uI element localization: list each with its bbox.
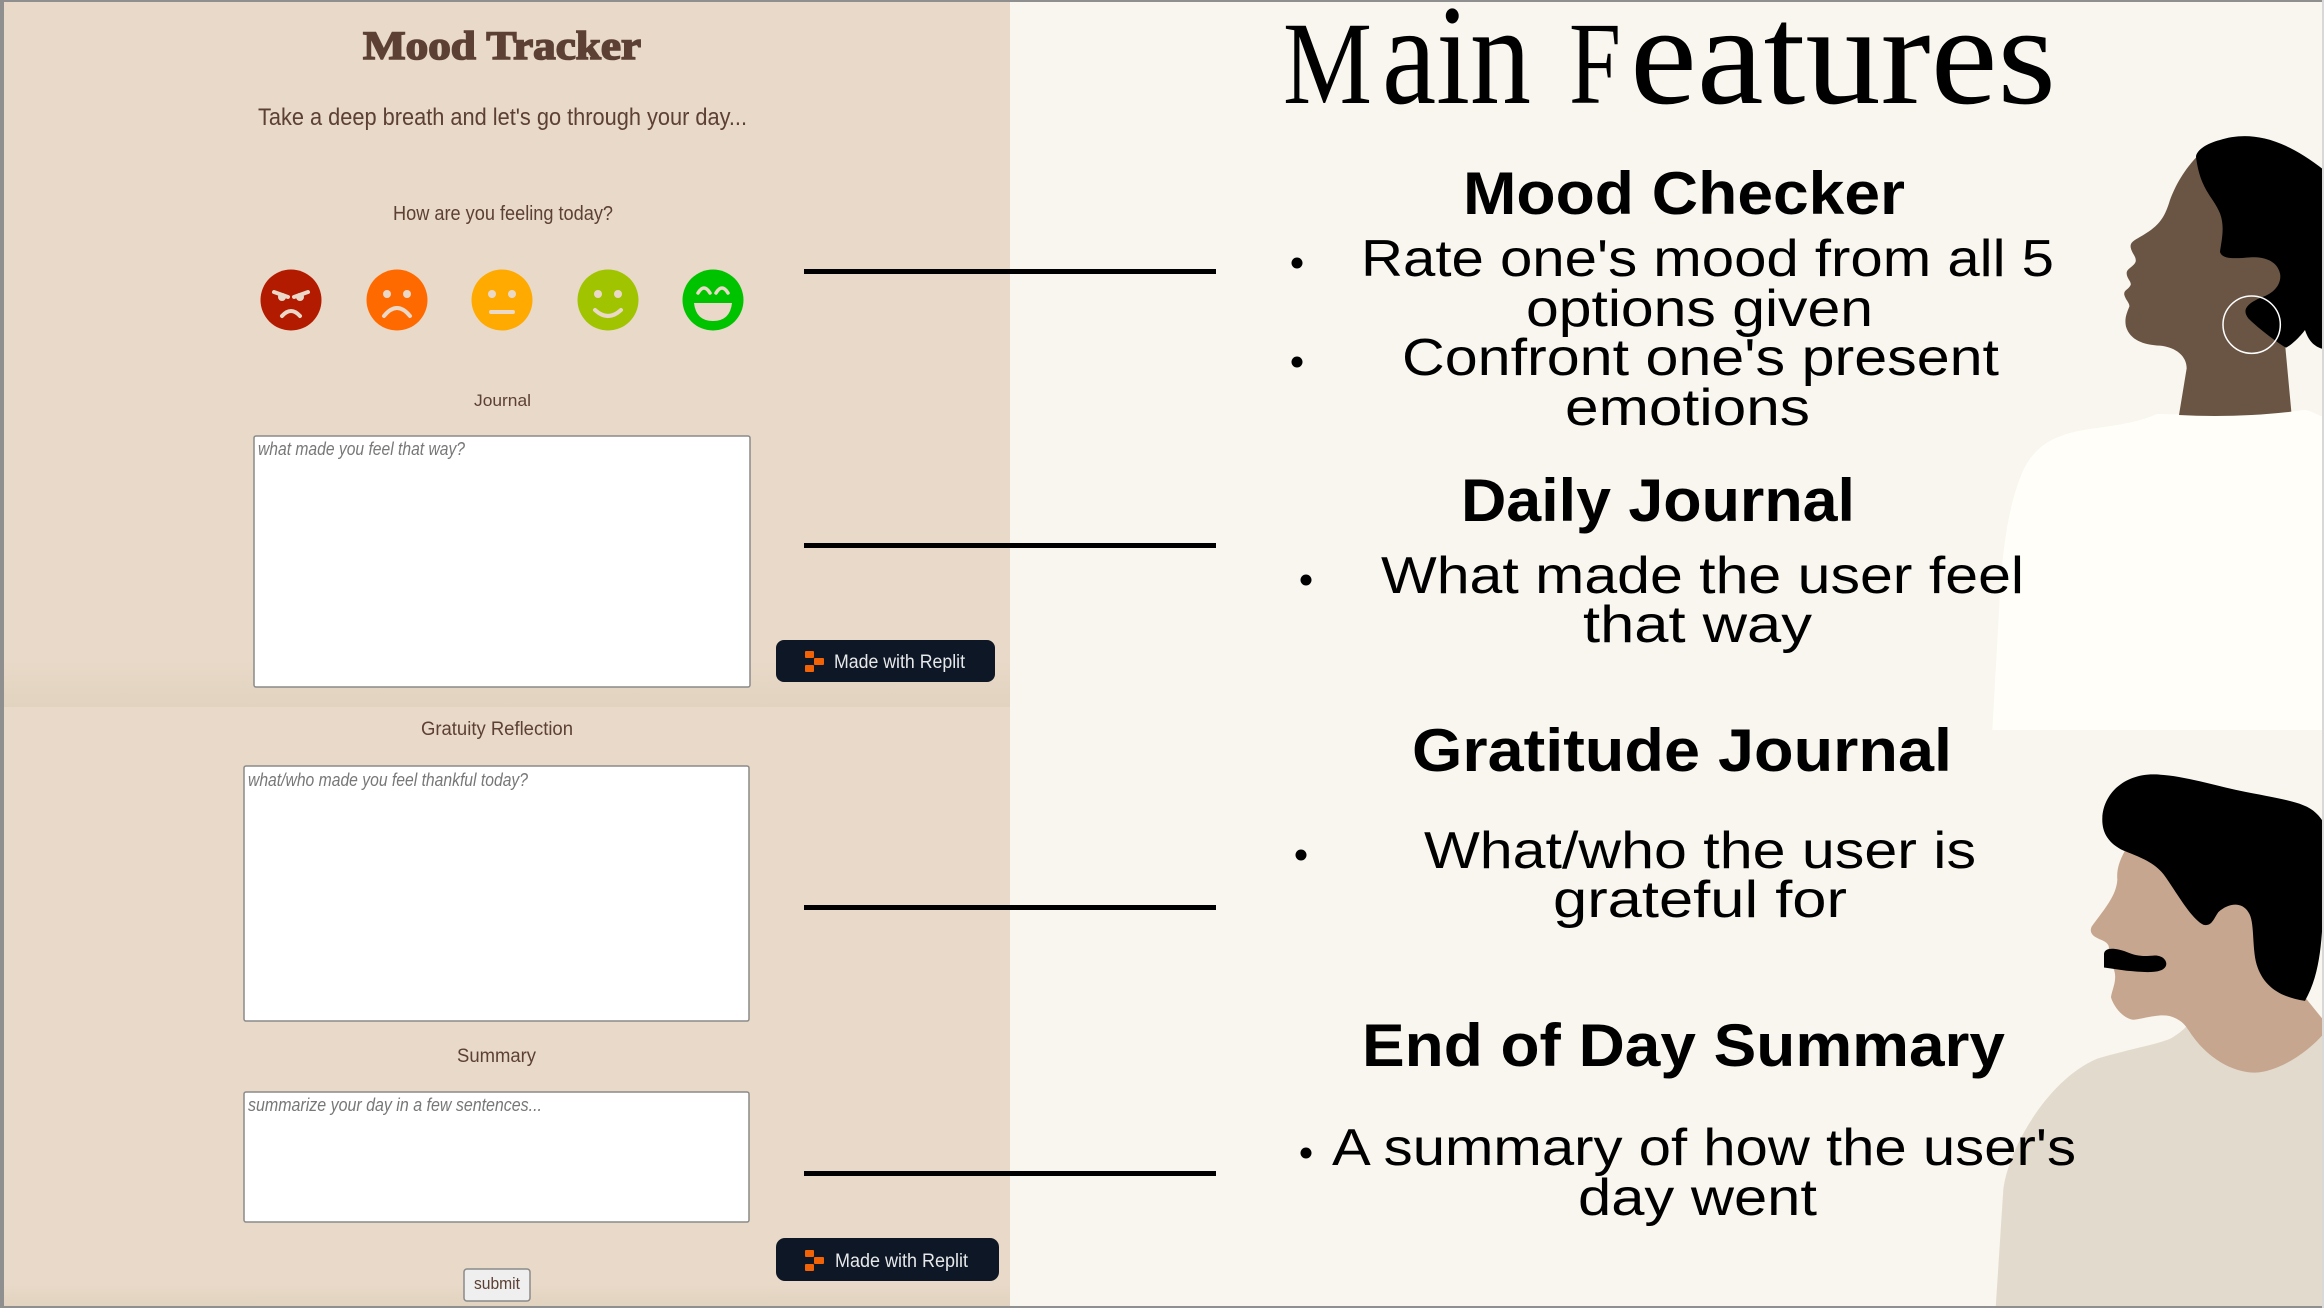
journal textarea: what made you feel that way? (258, 439, 465, 459)
bullet point one: options given (1526, 280, 1873, 338)
feature: end of day summary (1300, 1012, 2076, 1227)
app tagline: Take a deep breath and let's go through your day... (258, 104, 747, 131)
gratitude textarea: what/who made you feel thankful today? (248, 770, 528, 790)
badge: made with replit lower (776, 1238, 999, 1281)
bullet point (1300, 547, 2024, 654)
icon: laughing face (682, 270, 744, 330)
journal textarea (254, 436, 750, 687)
bullet point: grateful for (1553, 871, 1847, 929)
feature heading: Daily Journal (1461, 467, 1855, 534)
mood emoji row (260, 270, 744, 330)
connector line: gratitude journal (804, 905, 1216, 910)
illustration: woman profile (1992, 136, 2324, 730)
main heading: M (1283, 0, 1372, 129)
feature heading: End of Day Summary (1362, 1012, 2006, 1079)
bullet point (1300, 1119, 2076, 1227)
bullet point: What made the user feel (1381, 547, 2024, 605)
gratitude textarea (244, 766, 749, 1021)
icon: angry face (260, 270, 322, 330)
bullet point one: Rate one's mood from all 5 (1361, 230, 2054, 288)
badge: made with replit (776, 640, 995, 682)
bullet point: day went (1578, 1169, 1818, 1227)
illustration: man profile (1996, 774, 2324, 1308)
summary textarea (244, 1092, 749, 1222)
icon: neutral face (472, 270, 532, 330)
feature heading: Mood Checker (1463, 160, 1905, 227)
bullet point: that way (1583, 596, 1812, 654)
feature: daily journal (1300, 467, 2024, 654)
bullet point: What/who the user is (1424, 822, 1976, 880)
bullet point one (1292, 230, 2054, 338)
icon: sad face (366, 270, 428, 330)
bullet point two: emotions (1565, 379, 1810, 437)
feature: mood checker (1292, 160, 2054, 437)
badge: made with replit lower: Made with Replit (835, 1251, 969, 1272)
connector line: summary (804, 1171, 1216, 1176)
submit button: submit (474, 1274, 520, 1293)
main heading: F (1569, 0, 1621, 129)
bullet point two: Confront one's present (1402, 329, 2000, 387)
connector line: daily journal (804, 543, 1216, 548)
icon: happy face (578, 270, 638, 330)
gratitude label: Gratuity Reflection (421, 719, 573, 740)
journal label: Journal (474, 391, 531, 410)
submit button (464, 1269, 530, 1301)
bullet point (1296, 822, 1976, 929)
summary label: Summary (457, 1046, 536, 1067)
feature heading: Gratitude Journal (1412, 717, 1952, 784)
mood question: How are you feeling today? (393, 203, 613, 225)
feature: gratitude journal (1296, 717, 1976, 929)
bullet point two (1292, 329, 2000, 437)
app title: Mood Tracker (363, 23, 641, 68)
connector line: mood checker (804, 269, 1216, 274)
panel: app screenshot (0, 0, 1010, 1308)
summary textarea: summarize your day in a few sentences... (248, 1095, 542, 1115)
bullet point: A summary of how the user's (1332, 1119, 2076, 1177)
badge: made with replit: Made with Replit (834, 652, 966, 673)
